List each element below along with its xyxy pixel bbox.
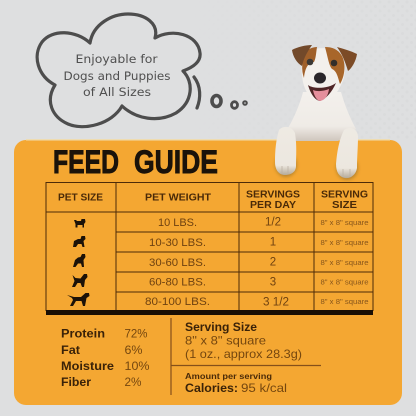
- table headers: PET WEIGHT: [145, 192, 212, 204]
- pet weight column: 10 LBS.: [158, 217, 197, 229]
- serving size column: 8" x 8" square: [320, 297, 368, 306]
- mouth and tongue: [308, 83, 336, 101]
- pet weight column: 80-100 LBS.: [145, 296, 210, 308]
- ears: [292, 45, 312, 66]
- bubble text: Dogs and Puppies: [64, 69, 171, 83]
- servings per day column: 2: [270, 256, 276, 268]
- serving size column: 8" x 8" square: [320, 278, 368, 286]
- serving info: 8" x 8" square: [185, 334, 266, 348]
- table headers: PET SIZE: [58, 192, 103, 204]
- servings per day column: 3: [270, 276, 276, 288]
- servings per day column: 1: [270, 236, 276, 248]
- pet weight column: [145, 217, 210, 308]
- nutrition facts: Moisture: [61, 359, 114, 373]
- nutrition facts: 2%: [124, 375, 142, 389]
- nose: [314, 72, 326, 84]
- panel: feed guide: [14, 139, 402, 405]
- title: GUIDE: [134, 144, 218, 180]
- thought bubble: [37, 14, 247, 127]
- bubble text: of All Sizes: [83, 85, 151, 99]
- nutrition facts: 72%: [124, 326, 148, 340]
- table headers: [58, 188, 368, 211]
- table headers: PER DAY: [250, 199, 296, 211]
- table headers: SERVINGS: [246, 188, 300, 200]
- serving info: 95 k/cal: [241, 381, 287, 395]
- serving info: Amount per serving: [185, 371, 272, 381]
- servings per day column: 1/2: [265, 216, 281, 228]
- nutrition facts: Fat: [61, 343, 80, 357]
- pet weight column: 30-60 LBS.: [149, 257, 206, 269]
- pet weight column: 60-80 LBS.: [149, 276, 206, 288]
- serving info: Calories:: [185, 381, 238, 395]
- bubble text: [64, 52, 171, 99]
- serving size column: 8" x 8" square: [320, 258, 368, 267]
- serving size column: 8" x 8" square: [320, 218, 368, 227]
- trailing thought marks: [194, 77, 247, 108]
- body: [288, 92, 356, 141]
- nutrition facts: Protein: [61, 326, 105, 340]
- title: [53, 144, 218, 180]
- nutrition facts: 10%: [124, 359, 150, 373]
- eyes: [307, 59, 313, 65]
- dog size icons: [67, 219, 90, 306]
- serving info: Serving Size: [185, 320, 257, 334]
- dog photo illustration: [275, 45, 358, 180]
- feeding table: [46, 182, 373, 315]
- head brown patches: [302, 47, 317, 78]
- paw shadows: [275, 153, 358, 180]
- table headers: SERVING: [321, 188, 368, 200]
- serving info: (1 oz., approx 28.3g): [185, 347, 302, 361]
- serving size column: 8" x 8" square: [320, 238, 368, 247]
- serving info: [171, 318, 321, 395]
- title: FEED: [53, 144, 119, 180]
- nutrition facts: [61, 326, 150, 389]
- head: [302, 48, 345, 102]
- table headers: SIZE: [332, 199, 357, 211]
- nutrition facts: Fiber: [61, 375, 91, 389]
- servings per day column: [263, 216, 289, 308]
- serving size column: [320, 218, 368, 306]
- servings per day column: 3 1/2: [263, 296, 289, 308]
- pet weight column: 10-30 LBS.: [149, 237, 206, 249]
- front legs: [275, 127, 296, 175]
- nutrition facts: 6%: [124, 343, 143, 357]
- bubble text: Enjoyable for: [76, 52, 158, 66]
